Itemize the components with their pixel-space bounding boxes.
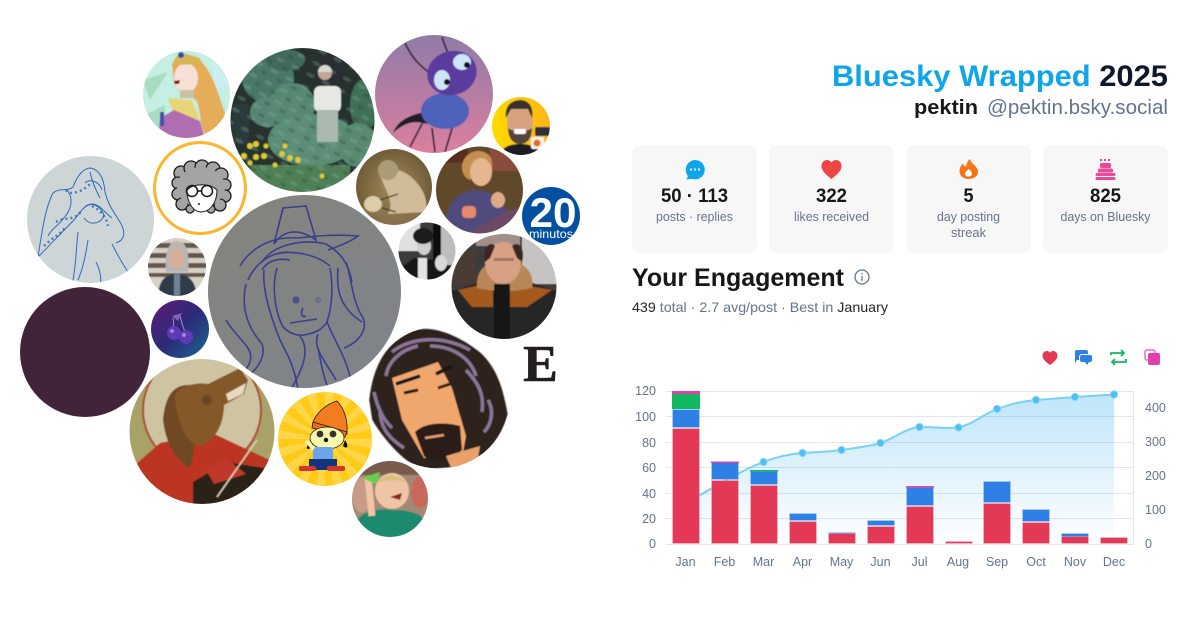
avatar: woman with grey hair xyxy=(148,238,206,296)
stacked bars: likes xyxy=(672,428,1128,544)
avatar: man in garden xyxy=(228,44,378,197)
engagement summary: 439 total · 2.7 avg/post · Best in January xyxy=(632,299,888,315)
month labels: Jun xyxy=(870,555,891,569)
icon: birthday cake xyxy=(1096,159,1116,180)
icon: replies bubbles xyxy=(1075,350,1092,365)
month labels: Apr xyxy=(793,555,812,569)
avatar: blue ink sketch xyxy=(25,154,157,286)
line markers xyxy=(760,391,1118,466)
left axis labels xyxy=(635,384,656,551)
chart legend icons xyxy=(1042,350,1160,365)
stacked bars: reposts xyxy=(672,394,778,472)
stat card: likes received xyxy=(769,145,894,253)
avatar: E logo xyxy=(512,336,569,393)
left axis labels: 100 xyxy=(635,410,656,424)
avatar: E logo: E xyxy=(523,336,558,393)
avatar: highlighted user, cartoon with glasses xyxy=(154,142,246,234)
stat value: 5 xyxy=(964,186,974,207)
avatar: woman on sofa with mug xyxy=(436,146,523,234)
month labels: Jul xyxy=(912,555,927,569)
icon: reposts arrows xyxy=(1111,350,1126,365)
cumulative area xyxy=(686,394,1114,544)
avatar: dog-headed saint icon xyxy=(130,359,274,504)
left axis labels: 120 xyxy=(635,384,656,398)
avatar: sepia figure xyxy=(354,147,434,227)
avatar: illustrated bearded man xyxy=(368,328,508,468)
icon: info xyxy=(855,270,869,284)
right axis labels: 0 xyxy=(1145,537,1152,551)
avatar bubble cluster xyxy=(20,32,582,540)
month labels: Nov xyxy=(1064,555,1087,569)
avatar: smiling man on yellow xyxy=(492,97,550,155)
left axis labels: 60 xyxy=(642,461,656,475)
stat label xyxy=(937,210,1000,240)
chart grid xyxy=(666,391,1134,544)
avatar: 20 minutos logo xyxy=(522,187,580,245)
stat card: days on Bluesky xyxy=(1043,145,1168,253)
right axis labels xyxy=(1145,401,1166,551)
avatar: cheering child in green shirt xyxy=(352,461,428,537)
avatar: big ballpoint pen drawing xyxy=(205,192,405,392)
stat value: 322 xyxy=(816,186,847,207)
month labels xyxy=(675,555,1125,569)
stat card: day posting streak xyxy=(906,145,1031,253)
icon: quotes squares xyxy=(1145,350,1160,365)
user display name: pektin xyxy=(914,96,978,119)
engagement chart xyxy=(635,384,1166,569)
icon: heart xyxy=(822,160,842,179)
icon: likes heart xyxy=(1042,351,1058,365)
stat label: likes received xyxy=(794,210,869,224)
stacked bars: quotes xyxy=(672,391,934,488)
left axis labels: 40 xyxy=(642,487,656,501)
left axis labels: 80 xyxy=(642,436,656,450)
month labels: May xyxy=(830,555,854,569)
stat label: posts · replies xyxy=(656,210,733,224)
avatar: 20 minutos logo: minutos xyxy=(529,227,573,241)
stat card: posts and replies xyxy=(632,145,757,253)
user handle: @pektin.bsky.social xyxy=(987,96,1168,119)
month labels: Aug xyxy=(947,555,969,569)
month labels: Mar xyxy=(753,555,774,569)
month labels: Jan xyxy=(675,555,696,569)
month labels: Dec xyxy=(1103,555,1125,569)
cumulative line xyxy=(686,394,1114,503)
month labels: Sep xyxy=(986,555,1008,569)
month labels: Oct xyxy=(1026,555,1046,569)
avatar: black and white man xyxy=(398,222,456,280)
stat value: 50 · 113 xyxy=(661,186,728,207)
icon: flame xyxy=(960,159,978,179)
avatar: cherry on purple gradient xyxy=(151,300,209,358)
left axis labels: 20 xyxy=(642,512,656,526)
icon: chat bubble xyxy=(686,160,705,180)
avatar: yellow rays cartoon dog in orange hat xyxy=(278,392,372,486)
stat value: 825 xyxy=(1090,186,1121,207)
stat label: days on Bluesky xyxy=(1060,210,1151,224)
avatar: bald man in leather jacket xyxy=(450,232,558,342)
title: Bluesky Wrapped 2025 xyxy=(832,60,1168,93)
right axis labels: 300 xyxy=(1145,435,1166,449)
avatar: plain dark plum circle xyxy=(20,287,150,417)
avatar: blonde princess xyxy=(143,51,230,138)
stat label: day posting xyxy=(937,210,1000,224)
right axis labels: 200 xyxy=(1145,469,1166,483)
left axis labels: 0 xyxy=(649,537,656,551)
right axis labels: 100 xyxy=(1145,503,1166,517)
right axis labels: 400 xyxy=(1145,401,1166,415)
avatar: 20 minutos logo: 20 xyxy=(530,189,576,236)
stacked bars: replies xyxy=(672,410,1088,536)
avatar: purple cartoon bug xyxy=(372,32,496,156)
heading: Your Engagement: Your Engagement xyxy=(632,264,845,292)
stat label: streak xyxy=(951,226,987,240)
month labels: Feb xyxy=(714,555,735,569)
